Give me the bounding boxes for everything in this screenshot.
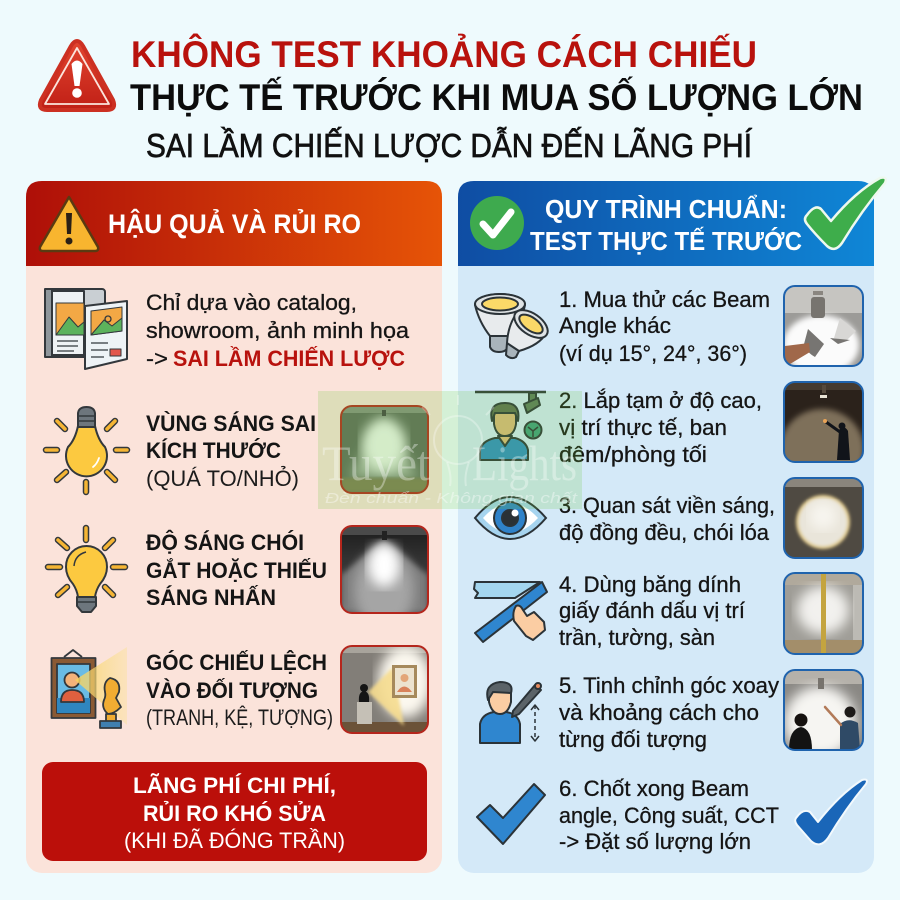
text: step 4: 4. Dùng băng dính: [559, 572, 741, 597]
photo: step 3: [784, 478, 863, 558]
heading: [530, 194, 802, 256]
title: THỰC TẾ TRƯỚC KHI MUA SỐ LƯỢNG LỚN: [130, 76, 863, 118]
heading: HẬU QUẢ VÀ RỦI RO: [108, 207, 361, 239]
text: step 4: giấy đánh dấu vị trí: [559, 598, 745, 623]
watermark: [318, 391, 582, 509]
text: step 1: Angle khác: [559, 313, 671, 338]
icon: catalog: [45, 289, 127, 369]
text: step 2: đêm/phòng tối: [559, 442, 707, 467]
icon: picture frame and bust: [52, 647, 127, 728]
icon: green check circle: [470, 196, 524, 250]
text: glare: [146, 530, 327, 610]
text: step 3: [559, 493, 775, 545]
text: step 3: 3. Quan sát viền sáng,: [559, 493, 775, 518]
text: catalog warning: [146, 290, 410, 371]
photo: step 1: [783, 286, 863, 375]
icon: big green check: [805, 178, 886, 249]
panel body: [458, 181, 874, 873]
title: [130, 33, 863, 118]
text: step 5: và khoảng cách cho: [559, 700, 759, 725]
item: wrong beam size: [46, 406, 428, 493]
title: KHÔNG TEST KHOẢNG CÁCH CHIẾU: [131, 33, 757, 75]
photo: step 4: [784, 573, 863, 654]
panel header: [458, 181, 874, 266]
photo: step 2: [783, 381, 864, 463]
text: step 4: trần, tường, sàn: [559, 625, 715, 650]
icon: installer with track light: [475, 392, 546, 460]
text: step 6: [559, 776, 779, 854]
text: wrong beam size: (QUÁ TO/NHỎ): [146, 466, 299, 491]
text: step 6: angle, Công suất, CCT: [559, 803, 779, 828]
callout: waste: (KHI ĐÃ ĐÓNG TRẦN): [124, 828, 345, 853]
text: catalog warning: showroom, ảnh minh họa: [146, 318, 410, 343]
item: catalog: [45, 289, 410, 371]
text: catalog warning: SAI LẦM CHIẾN LƯỢC: [173, 346, 405, 371]
panel body: [26, 181, 442, 873]
watermark: Đèn chuẩn - Không gian chất: [325, 490, 578, 507]
icon: bulb with rays: [46, 407, 127, 492]
text: glare: GẮT HOẶC THIẾU: [146, 558, 327, 583]
text: step 1: [559, 287, 770, 366]
icon: main warning triangle: [40, 41, 114, 110]
text: step 1: (ví dụ 15°, 24°, 36°): [559, 341, 747, 366]
text: step 5: 5. Tinh chỉnh góc xoay: [559, 673, 779, 698]
text: catalog warning: ->: [146, 346, 168, 371]
photo: wrong beam size: [341, 406, 428, 493]
text: step 5: từng đối tượng: [559, 727, 707, 752]
watermark: Tuyết: [322, 435, 430, 491]
text: glare: ĐỘ SÁNG CHÓI: [146, 530, 304, 555]
text: wrong beam size: [146, 411, 316, 491]
text: glare: SÁNG NHẤN: [146, 585, 276, 610]
panel: standard process: [458, 178, 886, 873]
icon: eye: [475, 497, 546, 539]
step 2: [475, 381, 864, 467]
subtitle: SAI LẦM CHIẾN LƯỢC DẪN ĐẾN LÃNG PHÍ: [146, 127, 753, 164]
text: misaligned angle: (TRANH, KỆ, TƯỢNG): [146, 705, 333, 730]
step 1: [475, 286, 863, 375]
text: misaligned angle: GÓC CHIẾU LỆCH: [146, 650, 327, 675]
icon: bright bulb: [48, 528, 125, 612]
icon: masking tape and hand: [474, 582, 547, 642]
panel header: [26, 181, 442, 266]
text: step 2: 2. Lắp tạm ở độ cao,: [559, 388, 762, 413]
icon: person with pencil: [480, 682, 541, 743]
icon: spotlights: [475, 294, 553, 358]
text: step 2: vị trí thực tế, ban: [559, 415, 727, 440]
step 4: [474, 572, 863, 654]
step 5: [480, 670, 863, 758]
watermark: Lights: [472, 435, 577, 491]
text: step 2: [559, 388, 762, 467]
text: step 3: độ đồng đều, chói lóa: [559, 520, 770, 545]
text: misaligned angle: [146, 650, 333, 730]
step 3: [475, 478, 863, 558]
item: glare: [44, 524, 429, 614]
photo: step 5: [784, 670, 863, 758]
callout: waste: [42, 762, 427, 861]
step 6: [477, 776, 867, 854]
text: step 6: -> Đặt số lượng lớn: [559, 829, 751, 854]
callout: waste: RỦI RO KHÓ SỬA: [143, 801, 326, 826]
callout: waste: LÃNG PHÍ CHI PHÍ,: [133, 773, 336, 798]
text: step 6: 6. Chốt xong Beam: [559, 776, 749, 801]
text: wrong beam size: VÙNG SÁNG SAI: [146, 411, 316, 436]
icon: outlined check: [477, 784, 545, 844]
text: step 4: [559, 572, 745, 650]
photo: misaligned angle: [341, 646, 432, 733]
text: step 1: 1. Mua thử các Beam: [559, 287, 770, 312]
text: catalog warning: Chỉ dựa vào catalog,: [146, 290, 357, 315]
panel: consequences: [26, 181, 442, 873]
photo: glare: [340, 525, 429, 614]
text: wrong beam size: KÍCH THƯỚC: [146, 438, 281, 463]
text: step 5: [559, 673, 779, 752]
icon: warning sign: [40, 197, 98, 251]
heading: TEST THỰC TẾ TRƯỚC: [530, 226, 802, 256]
heading: QUY TRÌNH CHUẨN:: [545, 194, 787, 224]
item: misaligned angle: [52, 646, 432, 733]
text: misaligned angle: VÀO ĐỐI TƯỢNG: [146, 677, 318, 703]
icon: big blue check: [795, 780, 867, 844]
